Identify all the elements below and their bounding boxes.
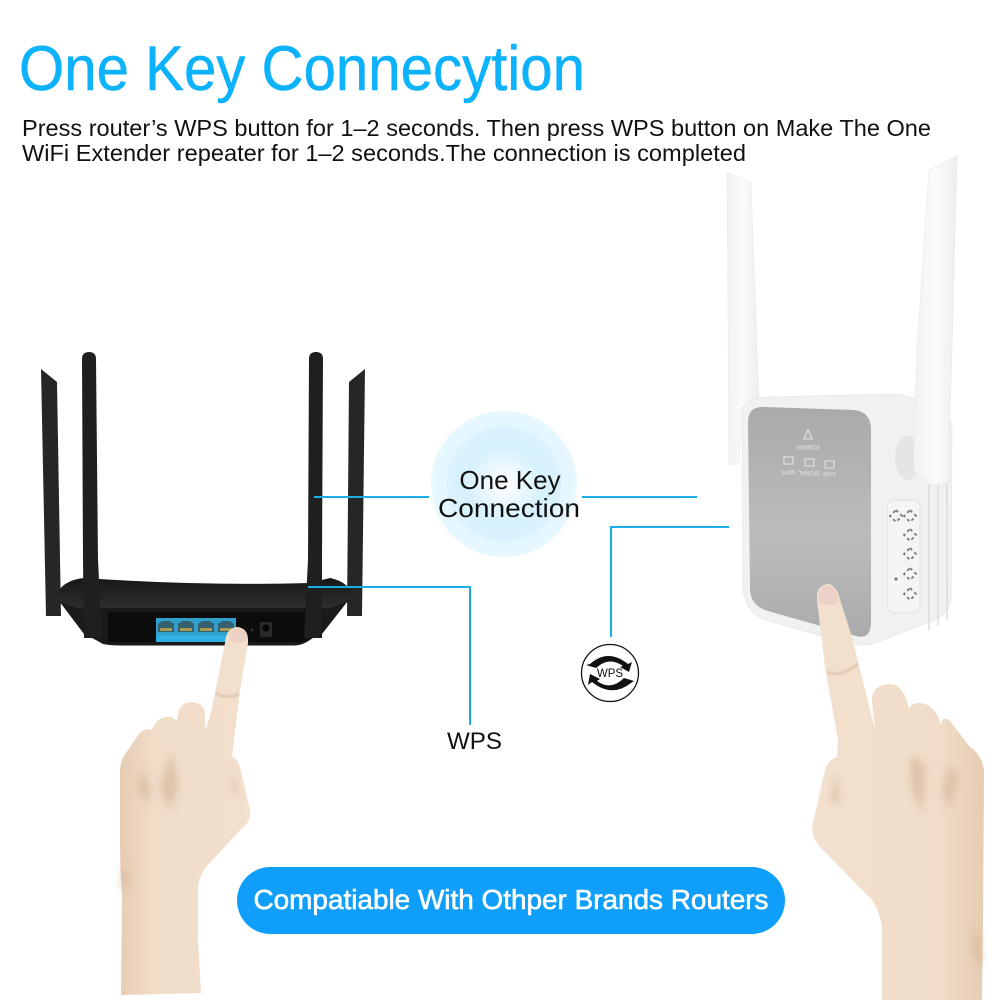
extender [727,156,957,645]
router [41,352,365,646]
extender side ribs [929,484,947,630]
description text: WiFi Extender repeater for 1–2 seconds.The connection is completed [22,140,746,166]
one key connection badge: One Key [459,465,561,495]
extender grey face plate [748,407,871,637]
right hand [812,584,984,1000]
extender right antenna [913,156,957,485]
left hand [120,627,250,995]
router body top [55,578,352,610]
one key connection badge [431,411,580,557]
extender body [742,394,952,645]
router ports panel [156,618,236,642]
router body wings [56,597,90,636]
left fingernail [229,628,247,642]
description text: Press router’s WPS button for 1–2 seconds. Then press WPS button on Make The One [22,115,931,141]
title: One Key Connecytion [19,34,585,104]
extender side vents [887,500,920,613]
description text [22,115,931,166]
extender left antenna [727,172,759,465]
extender indicator labels: SIGNAL [797,469,820,475]
WPS label: WPS [447,728,502,755]
WPS icon: WPS [597,668,623,680]
right finger crease [827,664,858,674]
extender indicator labels: WPS [781,468,795,474]
right fingernail [818,585,838,605]
left hand knuckle shading [121,752,238,890]
extender indicator labels: POWER [796,443,819,449]
router rear panel [108,612,306,642]
router inner antennas [82,352,323,638]
WPS icon [582,644,638,702]
connector lines [308,497,729,725]
compatibility pill [237,867,785,934]
extender antenna hinge [895,436,921,480]
router outer antennas [41,369,365,616]
left finger crease [216,693,239,697]
right hand knuckle shading [830,755,982,970]
extender indicator labels: LAN [823,470,835,476]
compatibility pill: Compatiable With Othper Brands Routers [254,884,768,915]
router power socket [251,622,272,637]
extender indicator labels [781,430,835,476]
router body front [85,608,325,646]
one key connection badge: Connection [438,493,580,523]
